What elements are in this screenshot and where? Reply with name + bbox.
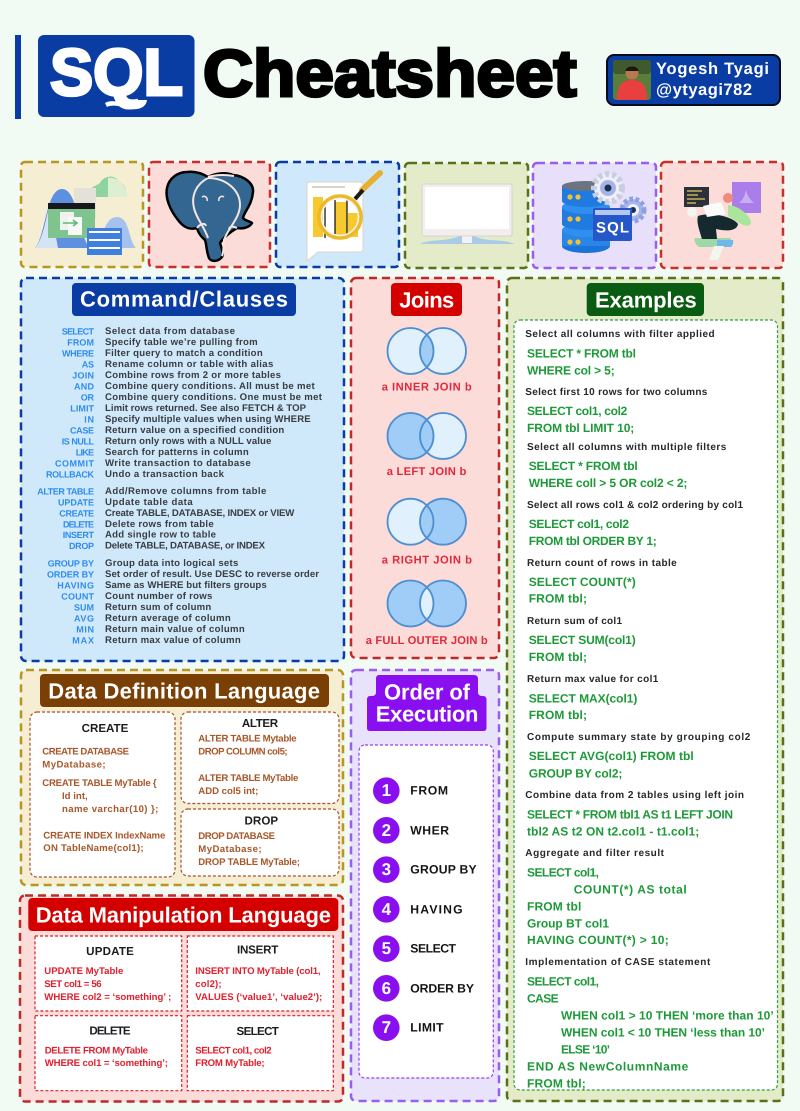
author photo: [613, 60, 651, 100]
step 1: FROM: [373, 777, 448, 804]
card: CREATE: CREATE: [82, 722, 129, 735]
SQL logo box: SQL: [50, 35, 183, 109]
clause list: grouping and aggregates: GROUP BY: [48, 559, 94, 569]
step 2: WHER: WHER: [410, 823, 449, 837]
clause list: grouping and aggregates: Count number of rows: [105, 591, 212, 602]
heading: Data Definition Language: Data Definition Language: [48, 678, 320, 704]
clause list: querying: CASE: [70, 425, 94, 435]
clause list: querying: Search for patterns in column: [105, 447, 249, 458]
card: DROP: DROP DATABASE: [198, 831, 276, 842]
example: sum: [527, 616, 636, 664]
clause list: grouping and aggregates: SUM: [74, 602, 94, 612]
execution card: [359, 745, 493, 1078]
example: filter all columns: WHERE col > 5;: [527, 363, 615, 377]
clause list: querying: SELECT: [62, 327, 94, 337]
clause list: querying: Rename column or table with alias: [105, 359, 273, 370]
card: UPDATE: [35, 936, 182, 1011]
card: INSERT: INSERT: [237, 944, 278, 956]
clause list: grouping and aggregates: HAVING: [57, 581, 94, 591]
card: DROP: [181, 809, 339, 876]
example: ordering: [527, 500, 743, 548]
examples card: [514, 320, 778, 1090]
heading: Command/Clauses: Command/Clauses: [80, 286, 288, 312]
card: ALTER: [181, 712, 339, 804]
example: max: Return max value for col1: [527, 674, 659, 685]
step 6: ORDER BY: [373, 975, 474, 1002]
example: group by: Compute summary state by grouping col2: [527, 732, 751, 743]
example: left join: tbl2 AS t2 ON t2.col1 - t1.col1;: [527, 824, 699, 838]
header: logo and title: [15, 35, 577, 119]
example: filter all columns: Select all columns with filter applied: [525, 329, 715, 340]
label: left join: a LEFT JOIN b: [387, 466, 466, 478]
thumbnail: cloud app: [21, 162, 143, 267]
clause list: querying: JOIN: [72, 371, 94, 381]
clause list: querying: Return value on a specified condition: [105, 425, 284, 436]
heading: Joins: [391, 283, 462, 316]
panel: Data Definition Language: [21, 670, 343, 885]
example: case statement: [525, 957, 774, 1091]
step 7: LIMIT: [373, 1014, 444, 1041]
panel: Order of Execution: [351, 670, 499, 1101]
card: DROP: DROP: [244, 814, 278, 828]
example: ordering: SELECT col1, col2: [529, 517, 629, 531]
card: INSERT: VALUES (‘value1’, ‘value2’);: [195, 992, 322, 1003]
clause list: querying: Specify table we’re pulling from: [105, 337, 258, 348]
step 5: SELECT: [373, 935, 457, 962]
example: aggregate and filter: [525, 848, 687, 947]
example: sum: SELECT SUM(col1): [529, 633, 636, 647]
example: count: SELECT COUNT(*): [529, 575, 636, 589]
card: DELETE: [35, 1016, 182, 1091]
example: left join: Combine data from 2 tables using left join: [525, 790, 744, 801]
heading: Order of Execution: Order of: [384, 680, 471, 704]
label: inner join: a INNER JOIN b: [382, 382, 472, 394]
step 2: WHER: [373, 817, 449, 844]
clause list: schema changes: [37, 486, 295, 552]
clause list: schema changes: DELETE: [63, 519, 94, 529]
example: first 10 rows: Select first 10 rows for two columns: [525, 387, 708, 398]
example: first 10 rows: FROM tbl LIMIT 10;: [527, 421, 634, 435]
venn: right join: [388, 499, 466, 545]
clause list: schema changes: DROP: [69, 541, 94, 551]
card: SELECT: FROM MyTable;: [195, 1058, 265, 1069]
example: left join: SELECT * FROM tbl1 AS t1 LEFT JOIN: [527, 807, 733, 821]
step 1: FROM: 1: [382, 781, 391, 800]
heading: Order of Execution: [367, 675, 486, 731]
card: ALTER: ALTER TABLE MyTable: [198, 773, 298, 784]
heading: Examples: [587, 283, 704, 316]
card: ALTER: ALTER TABLE Mytable: [198, 734, 297, 744]
clause list: querying: LIMIT: [70, 404, 94, 414]
step 3: GROUP BY: GROUP BY: [410, 863, 477, 877]
example: filter all columns: SELECT * FROM tbl: [527, 346, 636, 360]
clause list: grouping and aggregates: COUNT: [61, 592, 94, 602]
card: UPDATE: SET col1 = 56: [44, 979, 102, 990]
thumbnail: developer with laptop: [661, 162, 783, 268]
clause list: querying: WHERE: [62, 349, 94, 359]
clause list: grouping and aggregates: Same as WHERE but filters groups: [105, 580, 267, 591]
card: INSERT: [187, 936, 333, 1011]
thumbnail: chart report with magnifier: [276, 162, 399, 267]
label: right join: a RIGHT JOIN b: [382, 555, 472, 567]
example: max: [527, 674, 659, 722]
clause list: grouping and aggregates: Return average of column: [105, 613, 231, 624]
clause list: querying: AND: [74, 382, 94, 392]
clause list: grouping and aggregates: [47, 558, 319, 646]
venn: full outer join: [388, 580, 466, 626]
title: Cheatsheet: Cheatsheet: [203, 36, 577, 110]
step 4: HAVING: HAVING: [410, 902, 463, 916]
clause list: schema changes: Add single row to table: [105, 530, 216, 541]
panel: Examples: [507, 278, 783, 1101]
card: ALTER: DROP COLUMN col5;: [198, 746, 288, 758]
step 6: ORDER BY: 6: [382, 979, 391, 998]
clause list: querying: AS: [82, 360, 94, 370]
example: aggregate and filter: HAVING COUNT(*) > 10;: [527, 933, 669, 947]
clause list: grouping and aggregates: Set order of result. Use DESC to reverse order: [105, 569, 319, 580]
example: first 10 rows: SELECT col1, col2: [527, 404, 628, 418]
card: INSERT: col2);: [195, 979, 222, 990]
example: multiple filters: [527, 442, 727, 490]
thumbnail: PostgreSQL elephant: [149, 162, 270, 267]
thumbnail: SQL database: [533, 163, 656, 268]
step 2: WHER: 2: [382, 821, 391, 840]
step 4: HAVING: 4: [382, 900, 392, 919]
clause list: grouping and aggregates: MIN: [76, 624, 94, 634]
step 1: FROM: FROM: [410, 784, 448, 798]
panel: Command/Clauses: [21, 278, 344, 661]
card: DROP: MyDatabase;: [198, 844, 262, 855]
card: UPDATE: UPDATE: [86, 945, 134, 958]
example: ordering: Select all rows col1 & col2 ordering by col1: [527, 500, 743, 511]
clause list: schema changes: CREATE: [59, 508, 94, 518]
clause list: querying: Write transaction to database: [105, 458, 251, 469]
venn: inner join: [388, 328, 466, 374]
card: UPDATE: UPDATE MyTable: [44, 966, 123, 977]
example: aggregate and filter: SELECT col1,: [527, 865, 599, 879]
clause list: querying: COMMIT: [55, 458, 94, 468]
author handle: @ytyagi782: [656, 81, 752, 99]
clause list: grouping and aggregates: AVG: [74, 613, 94, 623]
example: case statement: Implementation of CASE statement: [525, 957, 711, 968]
example: case statement: END AS NewColumnName: [527, 1060, 689, 1074]
example: case statement: ELSE ‘10’: [561, 1042, 610, 1056]
clause list: querying: Select data from database: [105, 326, 235, 337]
clause list: schema changes: Add/Remove columns from table: [105, 486, 266, 497]
card: DELETE: WHERE col1 = ‘something’;: [45, 1058, 168, 1069]
accent bar: [15, 35, 21, 119]
example: count: FROM tbl;: [529, 592, 587, 606]
clause list: grouping and aggregates: ORDER BY: [47, 570, 94, 580]
step 3: GROUP BY: [373, 856, 477, 883]
clause list: querying: IN: [84, 414, 94, 424]
clause list: querying: Combine rows from 2 or more tables: [105, 370, 281, 381]
clause list: querying: OR: [81, 392, 94, 402]
example: case statement: SELECT col1,: [527, 974, 599, 988]
clause list: schema changes: ALTER TABLE: [37, 487, 94, 497]
clause list: querying: Combine query conditions. One must be met: [105, 392, 323, 403]
card: CREATE: [30, 712, 175, 877]
card: CREATE: name varchar(10) };: [62, 804, 158, 815]
example: sum: Return sum of col1: [527, 616, 622, 627]
card: CREATE: CREATE INDEX IndexName: [43, 830, 165, 842]
example: case statement: CASE: [527, 991, 559, 1005]
example: max: FROM tbl;: [529, 708, 587, 722]
step 5: SELECT: SELECT: [410, 942, 457, 956]
example: count: [527, 558, 677, 606]
card: CREATE: ON TableName(col1);: [43, 843, 144, 854]
example: group by: GROUP BY col2;: [529, 766, 622, 780]
clause list: querying: [46, 326, 323, 480]
example: ordering: FROM tbl ORDER BY 1;: [529, 534, 657, 548]
card: SELECT: SELECT col1, col2: [195, 1046, 272, 1056]
clause list: querying: Limit rows returned. See also FETCH & TOP: [105, 403, 307, 414]
example: count: Return count of rows in table: [527, 558, 677, 569]
step 6: ORDER BY: ORDER BY: [410, 981, 474, 995]
clause list: grouping and aggregates: Return main value of column: [105, 624, 245, 635]
clause list: schema changes: Delete rows from table: [105, 519, 214, 530]
card: ALTER: ADD col5 int;: [198, 786, 258, 797]
author name: Yogesh Tyagi: [656, 60, 769, 78]
thumbnail: SQL database: SQL: [596, 220, 629, 236]
example: filter all columns: [525, 329, 715, 377]
step 7: LIMIT: 7: [382, 1018, 391, 1037]
thumbnail: monitor: [405, 163, 528, 268]
clause list: querying: Undo a transaction back: [105, 469, 225, 480]
example: group by: [527, 732, 751, 780]
venn: left join: [388, 413, 466, 459]
step 4: HAVING: [373, 896, 463, 923]
step 7: LIMIT: LIMIT: [410, 1021, 444, 1035]
example: first 10 rows: [525, 387, 708, 435]
example: case statement: WHEN col1 > 10 THEN ‘more than 10’: [561, 1008, 774, 1022]
example: max: SELECT MAX(col1): [529, 691, 637, 705]
example: aggregate and filter: Group BT col1: [527, 916, 609, 930]
card: CREATE: MyDatabase;: [42, 760, 106, 770]
heading: Joins: Joins: [399, 288, 454, 312]
card: CREATE: CREATE DATABASE: [42, 746, 130, 758]
clause list: schema changes: Create TABLE, DATABASE, INDEX or VIEW: [105, 508, 295, 519]
clause list: grouping and aggregates: Return max value of column: [105, 635, 241, 646]
example: multiple filters: WHERE coll > 5 OR col2 < 2;: [529, 476, 687, 490]
card: CREATE: CREATE TABLE MyTable {: [42, 778, 157, 789]
heading: Examples: Examples: [595, 288, 697, 312]
clause list: schema changes: Update table data: [105, 497, 193, 508]
clause list: grouping and aggregates: Group data into logical sets: [105, 558, 238, 569]
clause list: querying: Specify multiple values when using WHERE: [105, 414, 311, 425]
card: ALTER: ALTER: [242, 717, 279, 730]
clause list: querying: Combine query conditions. All must be met: [105, 381, 315, 392]
example: multiple filters: SELECT * FROM tbl: [529, 459, 638, 473]
heading: Order of Execution: Execution: [376, 702, 478, 726]
clause list: grouping and aggregates: Return sum of column: [105, 602, 211, 613]
heading: Data Manipulation Language: Data Manipulation Language: [36, 902, 331, 928]
clause list: schema changes: Delete TABLE, DATABASE, or INDEX: [105, 540, 266, 552]
card: SELECT: SELECT: [237, 1025, 279, 1038]
clause list: querying: IS NULL: [62, 436, 94, 446]
example: multiple filters: Select all columns with multiple filters: [527, 442, 727, 453]
panel: Data Manipulation Language: [20, 896, 343, 1102]
example: case statement: FROM tbl;: [527, 1077, 586, 1091]
example: left join: [525, 790, 744, 838]
card: CREATE: Id int,: [62, 791, 88, 802]
panel: Joins: [351, 278, 499, 658]
card: DROP: DROP TABLE MyTable;: [198, 857, 300, 868]
clause list: querying: LIKE: [76, 447, 94, 457]
card: DELETE: DELETE: [89, 1024, 131, 1038]
clause list: querying: Return only rows with a NULL value: [105, 436, 271, 447]
example: aggregate and filter: Aggregate and filter result: [525, 848, 665, 859]
card: INSERT: INSERT INTO MyTable (col1,: [195, 966, 321, 977]
clause list: querying: ROLLBACK: [46, 469, 94, 479]
example: case statement: WHEN col1 < 10 THEN ‘less than 10’: [561, 1025, 765, 1039]
step 5: SELECT: 5: [382, 939, 391, 958]
example: aggregate and filter: FROM tbl: [527, 899, 581, 913]
card: SELECT: [187, 1016, 333, 1091]
card: UPDATE: WHERE col2 = ‘something’ ;: [44, 992, 171, 1003]
clause list: querying: Filter query to match a condition: [105, 348, 263, 359]
example: aggregate and filter: COUNT(*) AS total: [574, 882, 687, 896]
example: sum: FROM tbl;: [529, 650, 587, 664]
label: full outer join: a FULL OUTER JOIN b: [366, 635, 488, 647]
clause list: grouping and aggregates: MAX: [72, 635, 94, 645]
author badge: [607, 55, 780, 105]
example: group by: SELECT AVG(col1) FROM tbl: [529, 749, 694, 763]
clause list: querying: FROM: [67, 338, 94, 348]
clause list: schema changes: UPDATE: [58, 498, 94, 508]
step 3: GROUP BY: 3: [382, 860, 391, 879]
clause list: schema changes: INSERT: [63, 530, 94, 540]
card: DELETE: DELETE FROM MyTable: [45, 1046, 148, 1056]
